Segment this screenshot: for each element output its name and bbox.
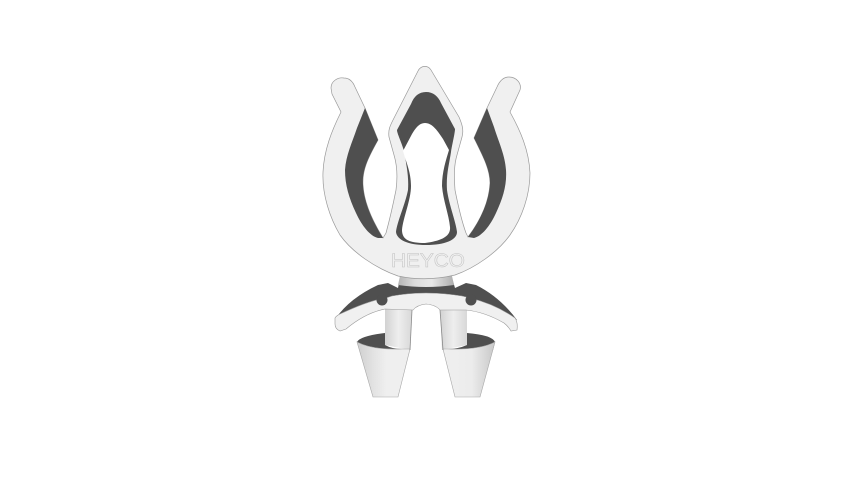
- embossed logo: HEYCO: [391, 251, 465, 272]
- right prong dark face: [468, 108, 506, 238]
- right cone top: [446, 333, 495, 352]
- centre tine dark face: [396, 92, 457, 245]
- right nub: [466, 294, 476, 306]
- right post inner edge: [440, 310, 443, 350]
- neck: [398, 276, 454, 287]
- left cone: [357, 342, 410, 397]
- left cone top: [357, 333, 404, 352]
- spring arc: [335, 293, 517, 331]
- right cone: [443, 342, 495, 397]
- lower section: posts and cone feet: [357, 305, 495, 397]
- left prong dark face: [345, 108, 383, 238]
- left post inner edge: [410, 310, 412, 350]
- left nub: [376, 294, 388, 306]
- trident body: [323, 66, 530, 279]
- dark wings behind spring arc: [336, 278, 517, 320]
- left post: [385, 305, 412, 350]
- right post: [440, 305, 467, 350]
- centre tine opening: [402, 123, 450, 243]
